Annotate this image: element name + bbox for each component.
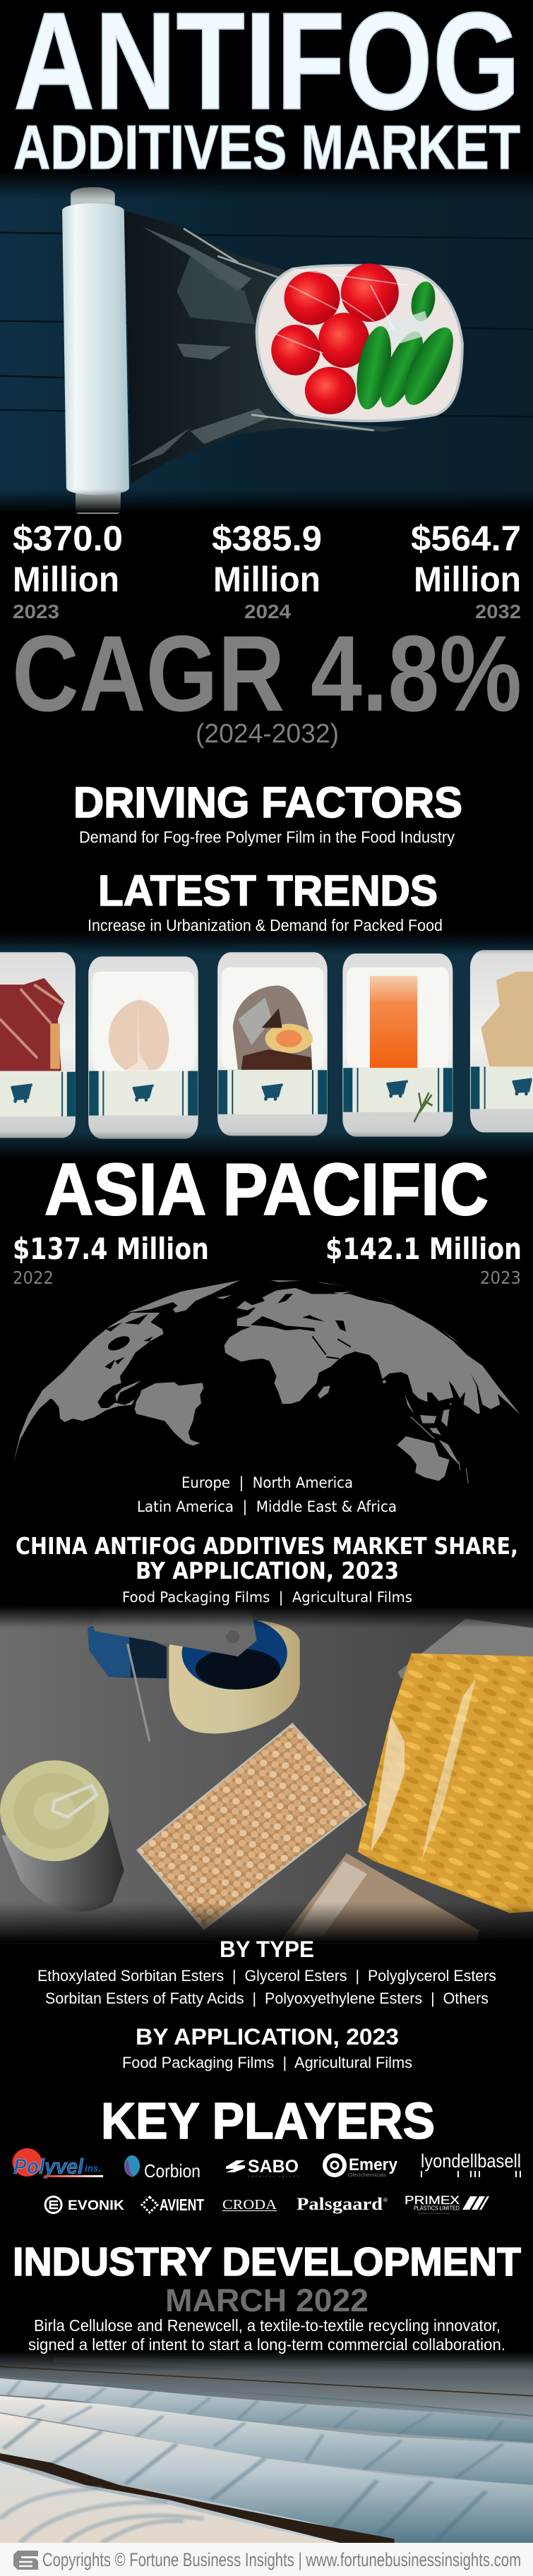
logo: Avient: AVIENT bbox=[160, 2196, 204, 2214]
logo: SABO: CHEMICAL VALUES bbox=[248, 2174, 299, 2178]
logo: Polyvel: Polyvel bbox=[13, 2154, 84, 2179]
tunnel row 2 bbox=[0, 2396, 533, 2486]
logo: Polyvel: Ins. bbox=[85, 2162, 101, 2174]
stat: Asia Pacific 2023: 2023 bbox=[480, 1268, 521, 1288]
stat: Asia Pacific 2023 bbox=[325, 1232, 522, 1288]
tunnel row 3 bbox=[0, 2414, 533, 2543]
logo: SABO bbox=[226, 2157, 299, 2178]
cucumbers bbox=[351, 279, 463, 412]
logo: Avient bbox=[142, 2196, 204, 2214]
stat: 2024 market size: $385.9 bbox=[212, 519, 322, 558]
text: other regions bbox=[137, 1474, 397, 1516]
tape roll bbox=[169, 1620, 300, 1733]
film sheet bbox=[124, 210, 408, 483]
tray 5 bbox=[470, 950, 533, 1132]
blue tape dispenser bbox=[88, 1622, 167, 1678]
text: other regions: Latin America | Middle East & Africa bbox=[137, 1498, 397, 1516]
heading: China market share bbox=[16, 1532, 518, 1584]
text: latest trend: Increase in Urbanization & Demand for Packed Food bbox=[88, 916, 443, 934]
logo: Corbion bbox=[124, 2155, 200, 2181]
logo: SABO: SABO bbox=[248, 2157, 299, 2177]
text: industry development detail bbox=[28, 2316, 505, 2354]
logo: Primex: PRIMEX bbox=[405, 2194, 460, 2207]
pasta bag bbox=[358, 1618, 533, 1913]
tray 2 bbox=[88, 956, 198, 1139]
packed food trays photo bbox=[0, 933, 533, 1159]
australia bbox=[397, 1436, 450, 1481]
chickpeas bag bbox=[138, 1724, 366, 1929]
stat: 2032 market size: 2032 bbox=[475, 601, 521, 622]
logo: Croda: CRODA bbox=[222, 2197, 277, 2213]
logo: LyondellBasell: lyondellbasell bbox=[421, 2150, 521, 2172]
stat: 2032 market size: Million bbox=[414, 560, 521, 599]
logo: Emery bbox=[325, 2155, 398, 2178]
southeast asia islands bbox=[405, 1395, 480, 1466]
heading: by application: BY APPLICATION, 2023 bbox=[136, 2024, 399, 2050]
heading: China market share: BY APPLICATION, 2023 bbox=[136, 1557, 399, 1584]
heading: industry development: INDUSTRY DEVELOPMENT bbox=[13, 2239, 521, 2285]
logo: Corbion: Corbion bbox=[144, 2160, 200, 2181]
stat: 2024 market size: Million bbox=[213, 560, 321, 599]
stat: Asia Pacific 2022: $137.4 Million bbox=[13, 1232, 209, 1266]
lower bag bbox=[279, 1853, 479, 1943]
text: other regions: Europe | North America bbox=[181, 1474, 353, 1492]
packaging photo bbox=[0, 1606, 533, 1943]
tray 4 bbox=[342, 953, 453, 1137]
heading: Asia Pacific: ASIA PACIFIC bbox=[44, 1149, 489, 1231]
stat: Asia Pacific 2022 bbox=[13, 1232, 209, 1288]
roll core bbox=[71, 187, 115, 207]
text: industry development detail: Birla Cellulose and Renewcell, a textile-to-textile recycling innovator, bbox=[34, 2316, 501, 2335]
stat: 2023 market size bbox=[13, 519, 123, 622]
text: type segments bbox=[37, 1967, 496, 2007]
date: March 2022: MARCH 2022 bbox=[165, 2282, 369, 2318]
tray 1 bbox=[0, 952, 76, 1138]
text: type segments: Sorbitan Esters of Fatty Acids | Polyoxyethylene Esters | Others bbox=[45, 1990, 489, 2007]
eurasia and africa bbox=[224, 1280, 521, 1483]
stat: 2023 market size: $370.0 bbox=[13, 519, 123, 558]
heading: by type: BY TYPE bbox=[220, 1937, 314, 1962]
tunnel row 4 bbox=[0, 2462, 337, 2543]
logo: Primex bbox=[405, 2194, 489, 2215]
text: China applications: Food Packaging Films | Agricultural Films bbox=[122, 1589, 412, 1606]
stat: 2023 market size: Million bbox=[13, 560, 119, 599]
world map bbox=[13, 1280, 521, 1483]
logo: Palsgaard: ® bbox=[383, 2197, 388, 2203]
title bbox=[13, 0, 520, 182]
text: industry development detail: signed a letter of intent to start a long-term commercial collaboration. bbox=[28, 2335, 505, 2354]
stat: 2023 market size: 2023 bbox=[13, 601, 59, 622]
text: type segments: Ethoxylated Sorbitan Esters | Glycerol Esters | Polyglycerol Esters bbox=[37, 1967, 496, 1985]
logo: Evonik bbox=[45, 2196, 124, 2213]
footer logo bbox=[13, 2551, 38, 2570]
CAGR period: (2024-2032) bbox=[196, 719, 339, 749]
logo: Palsgaard: Palsgaard bbox=[297, 2195, 383, 2214]
tomatoes bbox=[271, 263, 399, 414]
americas bbox=[13, 1280, 256, 1463]
logo: Evonik: EVONIK bbox=[68, 2198, 124, 2213]
text: driving factor: Demand for Fog-free Polymer Film in the Food Industry bbox=[79, 828, 455, 846]
film roll bbox=[62, 203, 129, 495]
stat: 2024 market size: 2024 bbox=[244, 601, 291, 622]
heading: latest trends: LATEST TRENDS bbox=[98, 867, 438, 915]
heading: driving factors: DRIVING FACTORS bbox=[73, 778, 462, 826]
text: application segments: Food Packaging Films | Agricultural Films bbox=[122, 2054, 412, 2071]
stat: 2032 market size: $564.7 bbox=[411, 519, 521, 558]
stat: 2024 market size bbox=[212, 519, 322, 622]
hero image: cling film roll and wrapped bowl of vegetables bbox=[0, 170, 533, 514]
soil between tunnels bbox=[0, 2453, 395, 2543]
footer band bbox=[0, 2543, 533, 2576]
tray 3 bbox=[217, 952, 328, 1136]
logo: Emery: Emery bbox=[349, 2155, 398, 2174]
madagascar bbox=[318, 1385, 330, 1399]
dispenser handle bbox=[92, 1609, 257, 1656]
logo: Polyvel bbox=[13, 2148, 103, 2179]
tin can bbox=[0, 1760, 124, 1912]
logo: Primex: A subsidiary of Primex Plastics Corporation bbox=[418, 2212, 450, 2215]
heading: key players: KEY PLAYERS bbox=[101, 2093, 435, 2150]
stat: Asia Pacific 2022: 2022 bbox=[13, 1268, 54, 1288]
stat: 2032 market size bbox=[411, 519, 521, 622]
logo: Emery: Oleochemicals bbox=[348, 2173, 387, 2178]
tunnel row 1 bbox=[0, 2378, 533, 2443]
greenhouse tunnels photo bbox=[0, 2350, 533, 2543]
bowl bbox=[257, 265, 462, 421]
logo: Primex: PLASTICS LIMITED bbox=[414, 2205, 460, 2212]
